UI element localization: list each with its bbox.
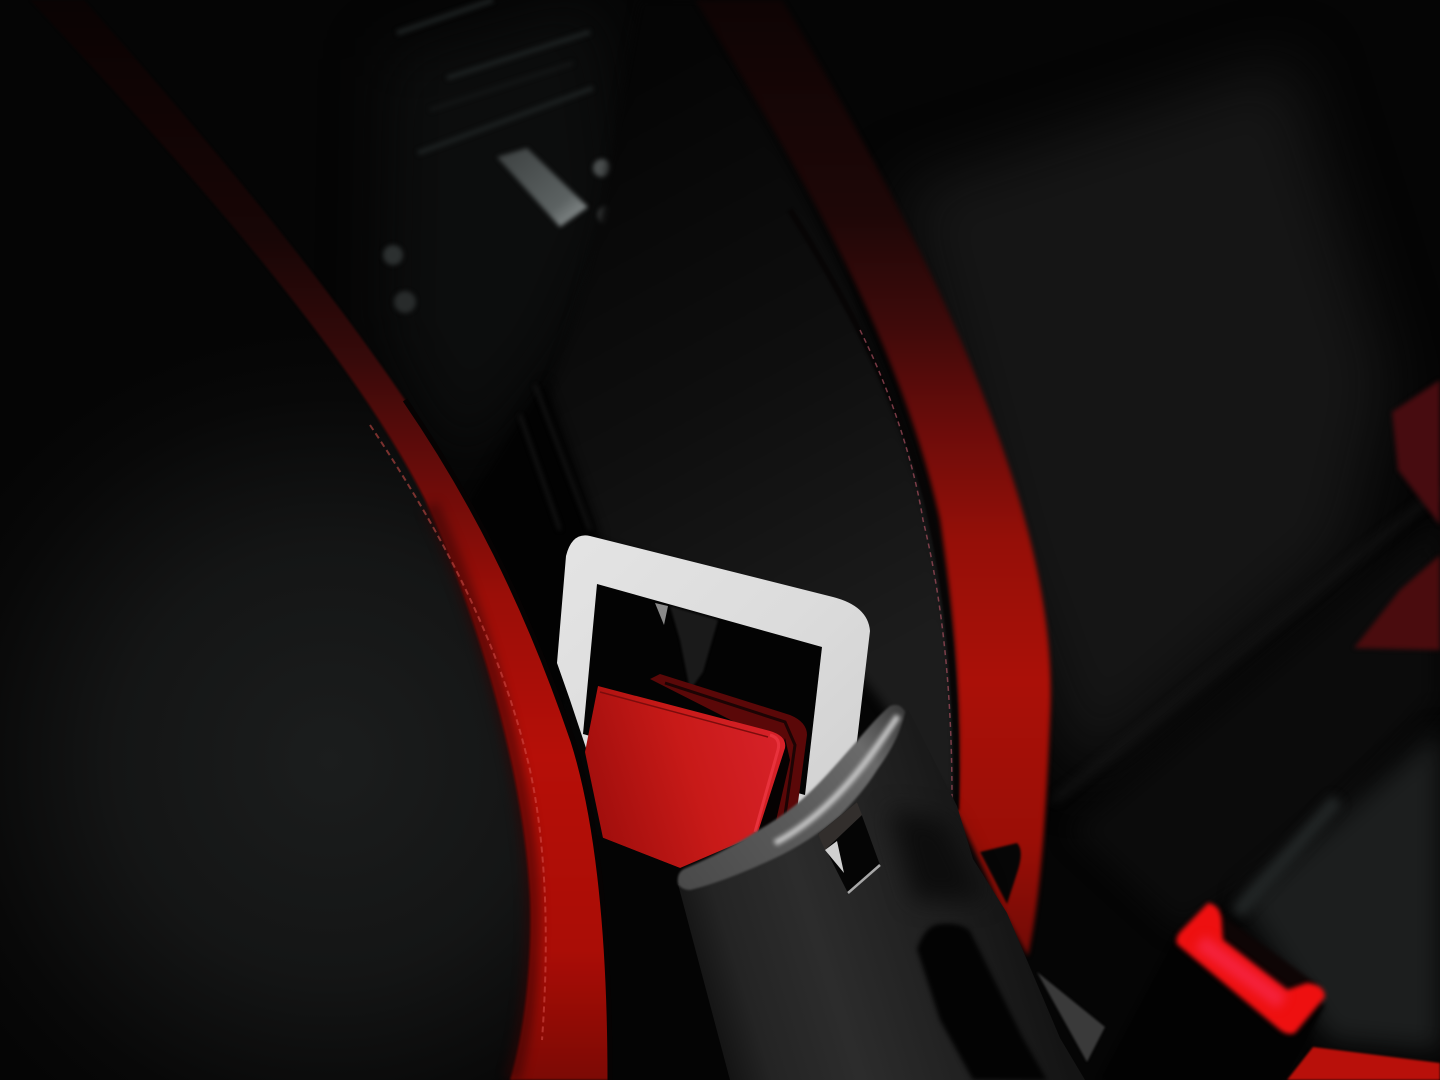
- buckle body: [1100, 935, 1325, 1080]
- panel: gap behind pocket: [470, 380, 600, 720]
- icon: silver buckle tongue: [497, 148, 588, 227]
- wallet back pages: [650, 674, 807, 825]
- band right seam: [405, 400, 610, 1080]
- icon: right red seat accents: [1354, 380, 1440, 650]
- band left shade: [430, 505, 532, 1080]
- panel: white tablet: [557, 535, 870, 840]
- pocket silver rim: [678, 705, 905, 890]
- panel: plastic pocket body: [596, 705, 1085, 1080]
- stitching: [370, 425, 546, 1040]
- panel: central seat leather: [545, 0, 958, 813]
- panel: left seat cushion: [0, 0, 530, 1080]
- tablet screen: [583, 584, 822, 795]
- black fin: [980, 843, 1021, 904]
- panel: upper rear seat buckle: [383, 0, 625, 470]
- pocket cut-out: [917, 924, 1047, 1080]
- wallet front: [585, 686, 785, 868]
- pocket slot: [818, 802, 880, 893]
- pocket shading: [890, 810, 985, 900]
- grey tongue patch: [1037, 972, 1105, 1062]
- icon: red glowing buckle slot: [1176, 903, 1325, 1034]
- seam: [790, 210, 956, 810]
- panel: left seat red band: [30, 0, 610, 1080]
- panel: right seat red band: [695, 0, 1051, 956]
- panel: red strap at bottom right: [1287, 1047, 1440, 1080]
- panel: seat belt buckle: [1037, 903, 1325, 1080]
- icon: red wallet: [585, 674, 807, 868]
- panel: rear seat right: [900, 60, 1440, 1050]
